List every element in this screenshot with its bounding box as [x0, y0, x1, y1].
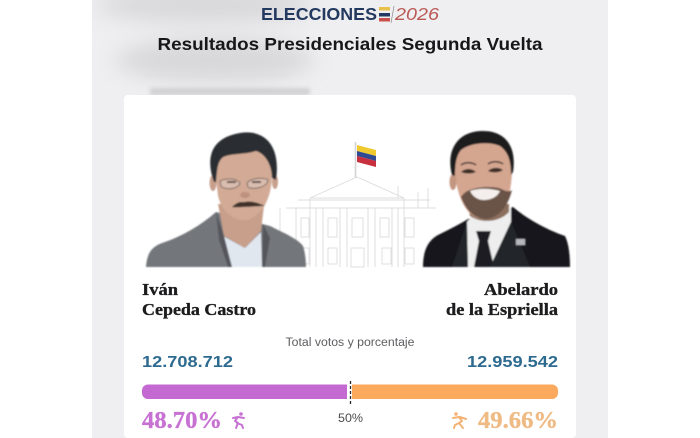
lapel — [452, 222, 530, 267]
beard — [461, 187, 512, 219]
glasses — [220, 178, 268, 189]
candidate name: Abelardo de la Espriella: Abelardo — [484, 280, 558, 299]
title: Resultados Presidenciales Segunda Vuelta — [158, 34, 543, 54]
portrait: Abelardo de la Espriella — [423, 131, 570, 267]
candidate name: Iván Cepeda Castro — [142, 280, 256, 319]
tie — [474, 231, 494, 267]
logo: Elecciones 2026: ELECCIONES — [261, 4, 377, 24]
results card — [124, 95, 576, 438]
votes: De la Espriella: 12.959.542 — [467, 354, 558, 371]
jacket — [146, 212, 306, 267]
face — [454, 141, 512, 219]
mustache — [232, 201, 265, 207]
candidate name: Iván Cepeda Castro: Iván — [142, 280, 179, 299]
logo: Elecciones 2026 — [261, 4, 439, 24]
votes: Cepeda: 12.708.712 — [142, 354, 233, 371]
candidate name: Iván Cepeda Castro: Cepeda Castro — [142, 300, 256, 319]
candidate name: Abelardo de la Espriella: de la Espriella — [446, 300, 559, 319]
icon: flag — [356, 142, 376, 178]
neck — [468, 204, 509, 221]
hair — [210, 132, 277, 182]
icon: runner orange — [453, 412, 466, 428]
logo: Elecciones 2026: 2026 — [394, 4, 439, 24]
shirt — [467, 207, 511, 267]
candidate name: Abelardo de la Espriella — [446, 280, 559, 319]
percentage: Cepeda: 48.70% — [142, 408, 222, 434]
label: 50%: 50% — [338, 411, 363, 425]
ears — [450, 174, 456, 190]
hair — [450, 131, 514, 176]
illustration: government palace — [280, 177, 436, 267]
progress bar — [142, 381, 558, 406]
jacket — [423, 207, 570, 267]
caption: total votes and percentage: Total votos y porcentaje — [286, 337, 414, 349]
pin — [516, 239, 525, 245]
face — [215, 146, 272, 220]
shirt — [223, 232, 262, 267]
eyes — [461, 168, 503, 174]
ears — [210, 175, 216, 191]
icon: runner purple — [233, 412, 244, 428]
portrait: Iván Cepeda Castro — [146, 132, 306, 267]
percentage: De la Espriella: 49.66% — [478, 408, 558, 434]
nose — [240, 192, 250, 198]
neck — [218, 204, 264, 248]
smile — [470, 189, 500, 200]
background panel — [92, 0, 608, 438]
